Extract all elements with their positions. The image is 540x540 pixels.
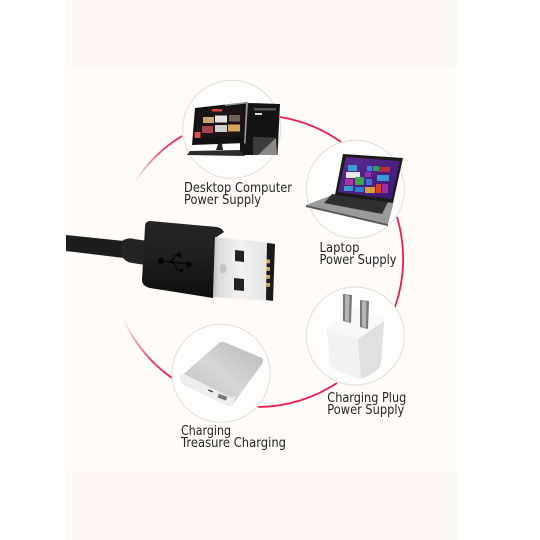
label: desktop computer: Desktop Computer (184, 180, 292, 196)
label: desktop computer: Power Supply (184, 192, 261, 208)
cable (66, 235, 124, 258)
label: charging plug: Power Supply (327, 402, 404, 418)
plug holes (234, 250, 244, 291)
icon: power bank front face (180, 374, 236, 406)
metal plug (213, 237, 274, 301)
label: desktop computer (184, 180, 292, 208)
red connecting ring (123, 117, 403, 407)
icon: plug prongs (343, 294, 369, 329)
icon: laptop lid (335, 154, 403, 203)
icon: keyboard deck (324, 194, 388, 214)
icon: keyboard (187, 150, 245, 156)
device circle: laptop (306, 140, 404, 238)
label: charging plug (327, 390, 406, 418)
icon: power bank ports (208, 389, 227, 401)
icon: laptop screen tiles (338, 157, 400, 199)
contact pins (266, 260, 270, 287)
device circle: desktop computer (183, 80, 281, 178)
label: power bank: Charging (181, 423, 231, 439)
icon: power bank body (180, 342, 263, 406)
icon: laptop base (306, 194, 393, 224)
plug end strip (266, 243, 275, 301)
usb cable connector (66, 221, 275, 301)
background panel (65, 0, 457, 540)
device circle: power bank (172, 324, 270, 422)
label: laptop: Power Supply (320, 252, 396, 268)
icon: plug body (327, 311, 384, 378)
label: power bank (180, 423, 286, 451)
usb symbol (158, 254, 192, 272)
icon: monitor (192, 102, 248, 150)
strain relief (122, 238, 148, 265)
label: laptop: Laptop (320, 240, 360, 256)
icon: computer tower (240, 103, 280, 155)
connector boot (142, 221, 224, 298)
label: charging plug: Charging Plug (327, 390, 406, 406)
label: power bank: Treasure Charging (180, 435, 286, 451)
led window (220, 264, 226, 274)
label: laptop (320, 240, 396, 268)
device circle: charging plug (306, 287, 404, 385)
